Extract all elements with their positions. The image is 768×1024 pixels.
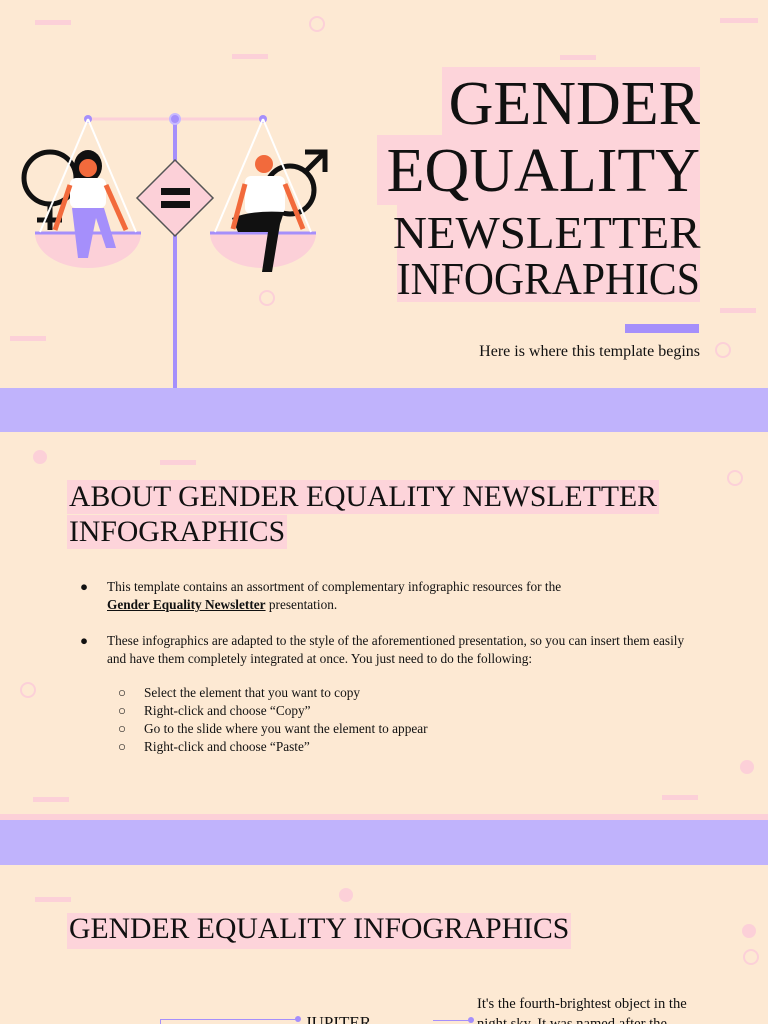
icon: male symbol (266, 152, 325, 214)
heading: gender equality infographics: GENDER EQUALITY INFOGRAPHICS (69, 913, 569, 945)
title: NEWSLETTER (392, 207, 700, 258)
text block: about bullets: These infographics are adapted to the style of the aforementioned presentation, so you can insert them easily (107, 633, 684, 648)
text block: about bullets: This template contains an assortment of complementary infographic resources for the (107, 579, 561, 594)
text block: about bullets: Right-click and choose “Paste” (144, 739, 310, 754)
text block: about bullets: ○ (118, 739, 126, 754)
text block: about bullets: and have them completely integrated at once. You just need to do the following: (107, 651, 532, 666)
equals diamond (137, 160, 213, 236)
second band (0, 814, 768, 865)
text block: about bullets: Right-click and choose “Copy” (144, 703, 311, 718)
text block: about bullets (80, 579, 684, 754)
purple band (0, 388, 768, 432)
title: GENDER (449, 70, 700, 138)
jupiter description: It's the fourth-brightest object in the (477, 996, 687, 1012)
heading: about: INFOGRAPHICS (69, 516, 285, 548)
right pan with man (210, 119, 316, 272)
illustration: balance scale (22, 113, 328, 388)
left pan with woman (35, 119, 141, 268)
title (377, 67, 700, 304)
text block: about bullets: ○ (118, 721, 126, 736)
jupiter label connector (160, 1013, 371, 1024)
text block: about bullets: ○ (118, 685, 126, 700)
accent bar (625, 324, 699, 333)
heading: about: ABOUT GENDER EQUALITY NEWSLETTER (69, 481, 657, 513)
title: INFOGRAPHICS (397, 253, 700, 304)
text block: about bullets: ○ (118, 703, 126, 718)
icon: female symbol (24, 152, 76, 230)
scale beam (84, 114, 267, 390)
jupiter description (433, 996, 687, 1024)
text block: about bullets: ● (80, 579, 88, 594)
text block: about bullets: Select the element that you want to copy (144, 685, 360, 700)
heading: about (67, 480, 659, 549)
subtitle: Here is where this template begins (479, 343, 700, 360)
title: EQUALITY (387, 137, 700, 205)
text block: about bullets: Gender Equality Newsletter presentation. (107, 597, 337, 612)
text block: about bullets: Go to the slide where you want the element to appear (144, 721, 428, 736)
text block: about bullets: ● (80, 633, 88, 648)
